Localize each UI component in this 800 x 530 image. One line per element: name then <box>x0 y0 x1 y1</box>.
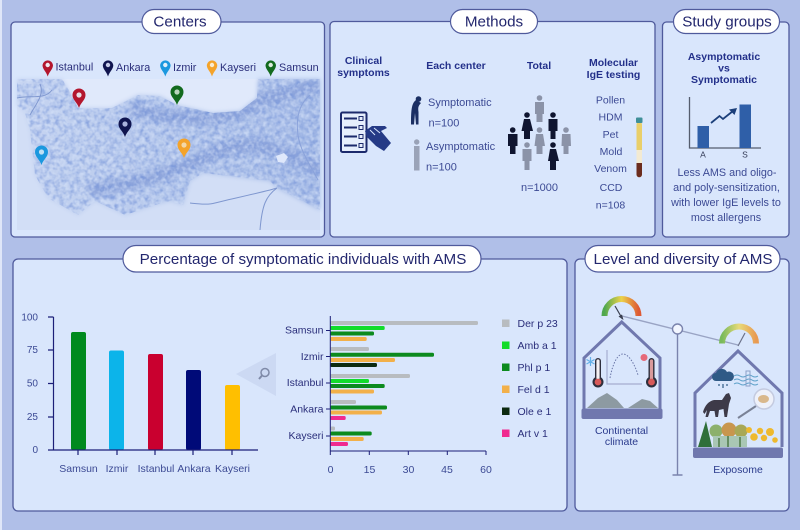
legend: Izmir: Izmir <box>173 62 197 74</box>
heading: asymptomatic vs symptomatic: Asymptomatic <box>688 51 760 63</box>
heading: asymptomatic vs symptomatic: Symptomatic <box>691 74 757 86</box>
heading: Study groups: Study groups <box>682 14 772 30</box>
bar chart: allergens by center: Izmir <box>301 351 324 363</box>
map of Turkey <box>17 79 320 230</box>
bar chart: AMS by center: 75 <box>27 345 38 356</box>
legend: Izmir <box>160 60 197 76</box>
chart: A vs S <box>690 97 761 160</box>
gauge: right <box>722 326 756 346</box>
map pin: Istanbul <box>72 88 86 108</box>
panel: methods <box>330 22 655 237</box>
bar chart: allergens by center: Istanbul <box>287 377 324 389</box>
balance scale <box>622 316 738 475</box>
icon: asymptomatic person <box>414 139 420 170</box>
bar chart: AMS by center: 50 <box>27 378 38 390</box>
bar chart: AMS by center: 100 <box>21 312 38 324</box>
heading: Level and diversity of AMS: Level and diversity of AMS <box>594 251 772 268</box>
bar chart: allergens by center: 15 <box>364 464 375 476</box>
text: asymptomatic n=100: Asymptomatic <box>426 141 496 153</box>
chart: A vs S: S <box>742 150 748 160</box>
list: allergens: CCD <box>600 182 623 194</box>
bar chart: allergens by center: 45 <box>441 464 453 476</box>
legend: Istanbul <box>42 60 93 76</box>
legend: Kayseri: Kayseri <box>220 62 256 74</box>
icon: group of people <box>508 95 571 170</box>
legend: allergens: Der p 23 <box>518 318 558 330</box>
heading: Centers <box>142 10 221 34</box>
icon: sun <box>640 354 648 361</box>
legend: allergens: Fel d 1 <box>518 384 550 396</box>
trees and pollen <box>698 421 778 447</box>
text: symptomatic n=100: Symptomatic <box>428 97 492 109</box>
panel: level and diversity of AMS <box>575 259 789 511</box>
heading: Clinical symptoms: Clinical <box>345 55 382 67</box>
map pin: Samsun <box>170 86 184 105</box>
text: study group finding: most allergens <box>691 212 762 224</box>
text: study group finding: Less AMS and oligo- <box>677 167 777 179</box>
legend: Istanbul: Istanbul <box>56 62 93 74</box>
heading: Methods <box>450 10 538 34</box>
bar chart: allergens by center: Kayseri <box>288 430 324 442</box>
bar chart: AMS by center: Izmir <box>106 463 129 475</box>
bar chart: AMS by center: 25 <box>27 412 38 423</box>
list: allergens: Mold <box>600 146 623 158</box>
label: continental climate: climate <box>605 436 638 448</box>
bar chart: allergens by center: 60 <box>480 464 492 476</box>
icon: rain cloud <box>712 369 734 388</box>
text: asymptomatic n=100: n=100 <box>426 162 457 174</box>
legend: allergens: Art v 1 <box>518 428 548 440</box>
bar chart: AMS by center <box>21 312 258 475</box>
bar chart: allergens by center: Ankara <box>290 404 324 416</box>
legend: Samsun <box>266 60 319 76</box>
bar chart: allergens by center: 30 <box>403 464 414 476</box>
panel: centers <box>11 22 324 237</box>
heading: Each center: Each center <box>426 60 486 72</box>
icon: symptomatic person <box>411 96 421 124</box>
label: continental climate: Continental <box>595 425 648 437</box>
legend: Kayseri <box>207 60 256 76</box>
legend: allergens: Phl p 1 <box>518 362 550 374</box>
list: allergens: Pet <box>603 129 618 141</box>
list: allergens: HDM <box>599 112 622 124</box>
house: exposome <box>693 351 783 458</box>
map pin: Izmir <box>35 146 48 165</box>
icon: cold thermometer <box>592 361 604 388</box>
heading: Methods: Methods <box>465 14 524 30</box>
heading: Percentage of symptomatic individuals with AMS: Percentage of symptomatic individuals with AMS <box>140 251 466 268</box>
legend: allergens: Ole e 1 <box>518 406 552 418</box>
callout: magnifier <box>236 353 276 396</box>
label: exposome: Exposome <box>713 464 763 476</box>
list: allergens: Pollen <box>596 94 625 106</box>
legend: Ankara: Ankara <box>116 62 150 74</box>
heading: Study groups <box>674 10 780 34</box>
panel: study groups <box>662 22 789 237</box>
heading: Level and diversity of AMS <box>585 246 780 272</box>
heading: Centers: Centers <box>153 14 207 30</box>
text: study group finding: and poly-sensitization, <box>673 182 780 194</box>
gauge: left <box>604 299 638 320</box>
map pin: Kayseri <box>178 138 190 158</box>
legend: Ankara <box>103 60 150 76</box>
icon: cat <box>703 393 731 417</box>
chart: A vs S: A <box>700 150 706 160</box>
heading: Clinical symptoms: symptoms <box>337 67 390 79</box>
bar chart: AMS by center: 0 <box>32 445 38 456</box>
list: allergens: Venom <box>594 163 627 175</box>
icon: magnifier with mite <box>738 389 774 418</box>
list: allergens: n=108 <box>596 200 625 212</box>
heading: Total: Total <box>527 60 551 72</box>
icon: checklist with hand <box>341 112 391 152</box>
bar chart: allergens by center: Samsun <box>285 324 324 336</box>
house: continental climate <box>582 322 662 419</box>
bar chart: allergens by center: 0 <box>328 464 334 476</box>
heading: asymptomatic vs symptomatic: vs <box>718 62 730 74</box>
legend: allergens: Amb a 1 <box>518 340 557 352</box>
bar chart: AMS by center: Ankara <box>177 463 211 475</box>
icon: snowflake <box>586 357 594 366</box>
text: symptomatic n=100: n=100 <box>428 118 459 130</box>
bar chart: AMS by center: Kayseri <box>215 463 250 475</box>
heading: Molecular IgE testing: IgE testing <box>587 69 640 81</box>
text: study group finding: with lower IgE levels to <box>670 197 781 209</box>
icon: hot thermometer <box>646 361 657 388</box>
bar chart: AMS by center: Samsun <box>59 463 98 475</box>
bar chart: allergens by center <box>285 316 492 476</box>
heading: Percentage of symptomatic individuals with AMS <box>123 246 481 272</box>
heading: Molecular IgE testing: Molecular <box>589 57 638 69</box>
icon: water <box>734 371 758 386</box>
text: n=1000: n=1000 <box>521 182 558 194</box>
bar chart: AMS by center: Istanbul <box>138 463 174 475</box>
climate curve <box>607 350 642 384</box>
legend: allergens <box>502 318 558 440</box>
icon: blood tube <box>636 118 642 177</box>
map pin: Ankara <box>118 118 132 137</box>
panel: percentage of symptomatic individuals <box>13 259 567 511</box>
legend: Samsun: Samsun <box>279 62 319 74</box>
